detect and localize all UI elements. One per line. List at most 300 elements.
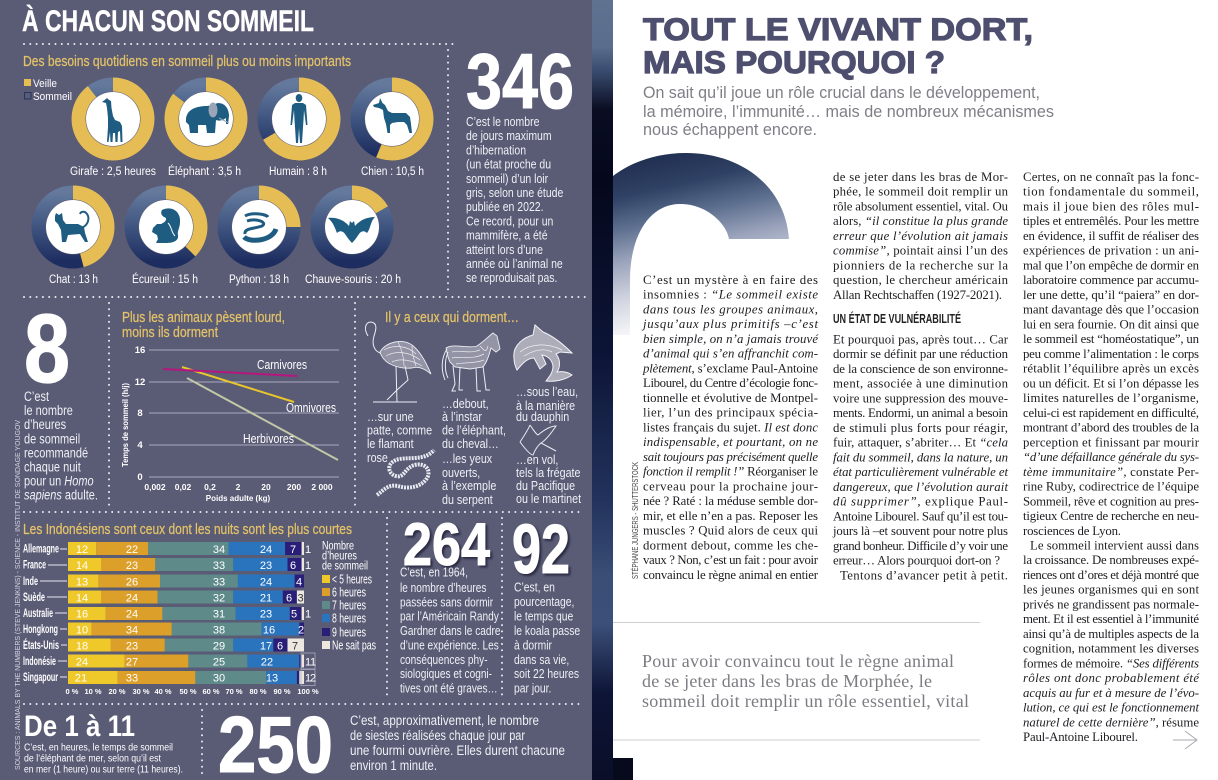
article column 3: ainsi qu’à de multiples aspects de la (1023, 627, 1199, 641)
legend: hours of sleep: Ne sait pas (332, 638, 376, 652)
row: Hongkong: 10 (76, 624, 88, 636)
article column 3: “d’une défaillance générale du sys- (1023, 450, 1199, 464)
row: France: France (23, 560, 46, 572)
article column 3: celui-ci est rapidement en difficulté, (1023, 406, 1199, 420)
article column 2: rôle absolument essentiel, vital. Ou (833, 200, 1009, 214)
y axis labels: Temps de sommeil (h/j) (120, 383, 130, 467)
row: Singapour: 13 (266, 672, 278, 684)
article column 3: ment. Et il est essentiel à l’immunité (1023, 612, 1199, 626)
article column 1: listes français du sujet. Il est donc (643, 420, 818, 434)
percentage axis (66, 687, 319, 696)
article column 1: tionnelle et évolutive de Montpel- (643, 391, 818, 405)
stat block: 264 hours without sleep: conséquences phy- (400, 654, 488, 667)
row: Australie: 24 (126, 608, 138, 620)
article column 3: Certes, on ne connaît pas la fonc- (1023, 170, 1199, 184)
y axis labels: 8 (137, 408, 143, 419)
stat block: 92 percent koala: soit 22 heures (514, 667, 579, 681)
stat block: 346 days of hibernation: 346 (466, 37, 574, 125)
stat block: 264 hours without sleep: Gardner dans le cadre (400, 625, 500, 638)
article column 3: laboratoire commence par accumu- (1023, 273, 1199, 287)
heading: heavier animals sleep less: Plus les animaux pèsent lourd, (122, 310, 285, 326)
line: herbivores (187, 378, 338, 460)
percentage axis: 90 % (273, 687, 291, 696)
donut: chauve-souris 20 hours: Chauve-souris : 20 h (305, 274, 401, 286)
line: herbivores: Herbivores (243, 432, 294, 446)
caption: snake (442, 451, 497, 507)
caption: horse: du cheval… (442, 436, 499, 451)
row: Allemagne: 22 (126, 544, 138, 556)
caption: snake: du serpent (442, 492, 493, 507)
article column 3: montrant d’abord des troubles de la (1023, 421, 1199, 435)
percentage axis: 70 % (225, 687, 243, 696)
article column 3: tigieux Centre de recherche en neu- (1023, 509, 1199, 523)
article column 3: riences ont d’ores et déjà montré que (1023, 568, 1199, 582)
illustration: frigate bird (520, 425, 556, 455)
row: Singapour: 33 (126, 672, 138, 684)
stat block: 346 days of hibernation: année où l’animal ne (466, 257, 563, 271)
caption: horse (442, 396, 506, 451)
article column 2: Et pourquoi pas, après tout… Car (833, 332, 1009, 346)
percentage axis: 100 % (297, 687, 319, 696)
legend: veille and sommeil: Veille (33, 78, 57, 90)
percentage axis: 40 % (154, 687, 172, 696)
caption: flamingo: patte, comme (367, 423, 432, 438)
legend: hours of sleep: de sommeil (322, 560, 368, 572)
row: Inde: 26 (126, 576, 138, 588)
article column 1 (641, 273, 819, 582)
drop cap C (613, 153, 789, 335)
row: Indonésie: 1 (310, 656, 316, 668)
article column 3: tion fondamentale du sommeil, (1023, 185, 1199, 199)
caption: frigate: ou le martinet (516, 491, 582, 506)
caption: horse: à l’instar (442, 409, 482, 424)
article title (643, 11, 1033, 80)
row: Suède (23, 590, 304, 604)
row: Australie: 16 (76, 608, 88, 620)
row: États-Unis: 29 (213, 640, 225, 652)
pull quote: sommeil doit remplir un rôle essentiel, vital (642, 691, 969, 711)
stat block: de 1 à 11: C’est, en heures, le temps de sommeil (24, 742, 173, 754)
y axis labels: 4 (137, 440, 143, 451)
row: Suède: 3 (297, 592, 304, 604)
row: Suède: 6 (286, 592, 292, 604)
article column 2: voire une suppression des mouve- (833, 392, 1008, 406)
stat block: 264 hours without sleep: passées sans dormir (400, 597, 493, 610)
caption: frigate: du Pacifique (516, 478, 576, 493)
article column 1: lier, l’un des principaux spécia- (643, 406, 818, 420)
article column 3: ler une dette, qu’il “paiera” en dor- (1023, 288, 1199, 302)
row: États-Unis (23, 638, 304, 652)
article column 1: dans tous les groupes animaux, (643, 302, 818, 316)
pull quote: Pour avoir convaincu tout le règne animal (642, 651, 954, 671)
row: États-Unis: 23 (126, 640, 138, 652)
row: Allemagne: Allemagne (23, 544, 59, 556)
donut: éléphant 3.5 hours: Éléphant : 3,5 h (168, 165, 241, 178)
article column 1: C’est un mystère à en faire des (643, 273, 818, 287)
x axis labels: 20 (261, 482, 271, 492)
article column 3: rétablit l’équilibre après un excès (1023, 362, 1199, 376)
row: Suède: 14 (76, 592, 88, 604)
article column 1: cerveau pour la prochaine jour- (643, 479, 818, 493)
stat block: 8 hours recommended (24, 294, 98, 503)
arrow: continue reading (1173, 731, 1197, 749)
donut: chien 10.5 hours (358, 84, 426, 178)
stat block: de 1 à 11: en mer (1 heure) ou sur terre (11 heures). (24, 764, 183, 776)
row: France: 1 (305, 560, 311, 572)
row: Suède: 32 (213, 592, 225, 604)
article column 3: rôles ont donc probablement été (1023, 671, 1200, 685)
row: Allemagne (23, 542, 311, 556)
article column 2: pionniers de la recherche sur la (833, 258, 1008, 272)
x axis labels: 2 000 (311, 482, 333, 492)
article column 2: dû supprimer”, explique Paul- (833, 495, 1008, 509)
article subtitle: nous échappent encore. (643, 121, 817, 139)
row: Indonésie: 27 (126, 656, 138, 668)
subheading: un état de vulnérabilité: UN ÉTAT DE VULNÉRABILITÉ (833, 311, 961, 326)
donut: python 18 hours: Python : 18 h (229, 274, 289, 286)
donut: humain 8 hours: Humain : 8 h (269, 166, 327, 178)
stat block: 264 hours without sleep: le nombre d’heures (400, 582, 487, 595)
stat block: 346 days of hibernation: d’hibernation (466, 143, 526, 158)
article column 3: perception et finissant par mourir (1023, 435, 1200, 449)
row: Australie: 5 (291, 608, 297, 620)
stat block: 8 hours recommended: 8 (24, 294, 70, 403)
stat block: 264 hours without sleep: C’est, en 1964, (400, 567, 468, 580)
x axis labels: 0,002 (144, 482, 166, 492)
article column 3: acquis au fur et à mesure de l’évo- (1023, 686, 1199, 700)
row: Hongkong: 2 (298, 624, 304, 636)
row: Suède: 21 (260, 592, 272, 604)
legend: veille and sommeil: Sommeil (33, 91, 72, 103)
caption: frigate: …en vol, (516, 452, 558, 467)
donut: humain 8 hours (264, 84, 334, 178)
donut: chat 13 hours: Chat : 13 h (49, 274, 98, 286)
stat block: 8 hours recommended: chaque nuit (24, 459, 81, 475)
donut: python 18 hours (224, 192, 294, 286)
article column 1: née ? Raté : la méduse semble dor- (643, 494, 818, 508)
row: Australie: 1 (305, 608, 311, 620)
article column 2: Antoine Libourel. Sauf qu’il est tou- (833, 509, 1008, 523)
row: Inde: 33 (213, 576, 225, 588)
caption: snake: ouverts, (442, 465, 480, 480)
article column 3: en évidence, il suffit de réaliser des (1023, 229, 1199, 243)
row: États-Unis: 18 (76, 640, 88, 652)
pull quote (613, 622, 980, 740)
article column 3: Le sommeil intervient aussi dans (1030, 538, 1199, 552)
stat block: 264 hours without sleep: siologiques et cogni- (400, 668, 492, 681)
row: Australie: 31 (213, 608, 225, 620)
percentage axis: 80 % (249, 687, 267, 696)
stat block: 264 hours without sleep (400, 511, 500, 696)
x axis labels: Poids adulte (kg) (206, 494, 271, 503)
legend: hours of sleep: d’heures (322, 550, 357, 562)
stat block: 92 percent koala: 92 (512, 510, 570, 588)
stat block: 346 days of hibernation: gris, selon une étude (466, 186, 563, 200)
article column 1: jusqu’aux plus primitifs –c’est (641, 317, 818, 331)
article column 1: Libourel, du Centre d’écologie fonc- (643, 376, 818, 390)
x axis labels: 200 (287, 482, 301, 492)
stat block: de 1 à 11 (24, 710, 183, 776)
caption: flamingo: rose (367, 450, 388, 465)
heading: indonesians sleep least: Les Indonésiens sont ceux dont les nuits sont les plus courtes (23, 522, 352, 538)
article column 2: état particulièrement vulnérable et (833, 465, 1008, 479)
x axis labels: 0,02 (175, 482, 192, 492)
article column 2: fuir, attaquer, s’abriter… Et “cela (833, 436, 1008, 450)
article column 2: ment, associée à une diminution (833, 377, 1009, 391)
legend: hours of sleep: Nombre (322, 540, 354, 552)
percentage axis: 10 % (84, 687, 102, 696)
stat block: 250 ant naps: une fourmi ouvrière. Elles durent chacune (350, 743, 565, 758)
row: États-Unis: 17 (260, 640, 272, 652)
article column 1: mir, et elle n’en a pas. Reposer les (643, 509, 818, 523)
article column 1: fonction il remplit !” Réorganiser le (643, 465, 818, 479)
stat block: de 1 à 11: De 1 à 11 (24, 710, 135, 743)
percentage axis: 30 % (132, 687, 150, 696)
article column 3: le sommeil est “homéostatique”, un (1023, 332, 1200, 346)
donut: girafe 2.5 hours (70, 84, 156, 178)
article column 3 (1023, 170, 1200, 744)
article column 3: Sommeil, rêve et cognition au pres- (1023, 494, 1199, 508)
row: France: 23 (126, 560, 138, 572)
row: Singapour: 30 (213, 672, 225, 684)
caption: dolphin: …sous l’eau, (516, 384, 578, 399)
legend: hours of sleep (322, 540, 376, 652)
stat block: 250 ant naps: de siestes réalisées chaque jour par (350, 728, 525, 743)
row: États-Unis: 6 (277, 640, 283, 652)
stat block: 92 percent koala: à dormir (514, 639, 552, 653)
panel: how some animals sleep (365, 310, 582, 507)
article column 3: la croissance. De nombreuses expé- (1023, 553, 1199, 567)
cloud strip between the two pages (592, 0, 633, 780)
stat block: 8 hours recommended: sapiens adulte. (24, 488, 98, 503)
article column 2: commise”, pointait ainsi l’un des (833, 244, 1008, 258)
article column 3: formes de mémoire. “Ses différents (1023, 656, 1199, 670)
row: Hongkong: 16 (263, 624, 275, 636)
row: France: 6 (290, 560, 296, 572)
row: Indonésie: Indonésie (23, 656, 56, 668)
illustration: flamingo (365, 322, 431, 402)
row: Allemagne: 24 (260, 544, 272, 556)
article column 3: naturel de cette dernière”, résume (1023, 715, 1199, 729)
stat block: 8 hours recommended: pour un Homo (24, 474, 94, 489)
article column 3: ou un déficit. Et si l’on dépasse les (1023, 376, 1199, 390)
article column 3: rine Ruby, codirectrice de l’équipe (1023, 480, 1199, 494)
article subtitle: On sait qu’il joue un rôle crucial dans le développement, (643, 84, 1040, 102)
article column 3: cognition, notamment les diverses (1023, 642, 1199, 656)
title: à chacun son sommeil: À CHACUN SON SOMMEIL (22, 4, 314, 38)
row: Hongkong: 34 (126, 624, 138, 636)
article column 3: privés ne grandissent pas normale- (1023, 598, 1199, 612)
row: Singapour (23, 670, 316, 686)
row: Inde: 24 (260, 576, 272, 588)
stat block: 264 hours without sleep: par l’Américain Randy (400, 611, 499, 624)
donut: chien 10.5 hours: Chien : 10,5 h (361, 166, 424, 178)
caption: dolphin: à la manière (516, 398, 576, 413)
stat block: 8 hours recommended: le nombre (24, 403, 73, 418)
heading: heavier animals sleep less (122, 310, 285, 341)
article column 1: muscles ? Quid alors de ceux qui (643, 524, 818, 538)
row: Indonésie: 1 (305, 656, 311, 668)
row: Australie (23, 607, 311, 620)
stat block: 92 percent koala: pourcentage, (514, 595, 574, 609)
article column 1: sait toujours pas précisément quelle (643, 450, 818, 464)
row: Singapour: 21 (75, 672, 87, 684)
article column 2: phée, le sommeil doit remplir un (833, 185, 1009, 199)
stat block: 264 hours without sleep: 264 (403, 511, 491, 578)
article column 3: lui en sera fournie. On dit ainsi que (1023, 317, 1199, 331)
stat block: 346 days of hibernation: mammifère, a été (466, 229, 548, 243)
caption: snake: …les yeux (442, 451, 492, 466)
row: Inde: Inde (23, 576, 38, 588)
percentage axis: 20 % (108, 687, 126, 696)
caption: flamingo: le flamant (367, 436, 414, 451)
row: Allemagne: 34 (213, 544, 225, 556)
legend: hours of sleep: < 5 heures (332, 572, 372, 586)
stat block: 264 hours without sleep: tives ont été graves… (400, 683, 498, 696)
caption: dolphin: du dauphin (516, 409, 569, 424)
article column 2: erreur que l’évolution ait jamais (833, 229, 1008, 243)
caption: frigate: tels la frégate (516, 465, 581, 480)
article column 2: erreur… Alors pourquoi dort-on ? (833, 554, 1000, 568)
article column 2: dangereux, que l’évolution aurait (833, 480, 1008, 494)
row: France: 33 (213, 560, 225, 572)
pull quote: de se jeter dans les bras de Morphée, le (642, 671, 932, 691)
line: carnivores: Carnivores (257, 358, 307, 372)
row: Hongkong: Hongkong (23, 624, 58, 636)
heading: heavier animals sleep less: moins ils dorment (122, 325, 218, 341)
stat block: 346 days of hibernation: sommeil) d’un loir (466, 172, 548, 186)
article column 3: rosciences de Lyon. (1023, 524, 1121, 538)
row: Inde: 13 (76, 576, 88, 588)
row: France (23, 558, 311, 572)
article column 3: expériences de privation : un ani- (1023, 244, 1199, 258)
article column 2: Allan Rechtschaffen (1927-2021). (833, 288, 1002, 302)
row: Indonésie: 22 (261, 656, 273, 668)
line: carnivores (163, 358, 307, 376)
y axis labels: 0 (137, 472, 143, 483)
article column 1: dorment debout, comme les che- (643, 538, 818, 552)
article column 2: jours là –et souvent pour notre plus (832, 524, 1008, 538)
article column 3: peu comme l’alimentation : le corps (1023, 347, 1199, 361)
source credit, vertical: SOURCES : ANIMALS BY THE NUMBERS (STEVE JENKINS) - SCIENCE - INSTITUT DE SONDAGE YOUGOV (13, 420, 22, 770)
caption: flamingo: …sur une (367, 409, 414, 424)
donut: chat 13 hours (38, 192, 108, 286)
stat block: 92 percent koala: dans sa vie, (514, 653, 569, 667)
article column 1: convaincu le règne animal en entier (643, 568, 819, 582)
article column 1: plètement, s’exclame Paul-Antoine (642, 361, 818, 375)
stat block: 250 ant naps (218, 700, 565, 780)
row: Allemagne: 1 (305, 544, 311, 556)
stat block: 346 days of hibernation: (un état proche du (466, 158, 551, 172)
article column 2: ments. Endormi, un animal a besoin (833, 406, 1009, 420)
stat block: 8 hours recommended: d’heures (24, 417, 66, 432)
row: Australie: 23 (260, 608, 272, 620)
stat block: 264 hours without sleep: d’une expérience. Les (400, 640, 499, 653)
y axis labels (120, 345, 145, 483)
row: France: 23 (260, 560, 272, 572)
x axis labels (144, 482, 333, 503)
donut: écureuil 15 hours: Écureuil : 15 h (132, 273, 198, 286)
article column 3: lution, ce qui est le fonctionnement (1023, 701, 1199, 715)
article column 2: Tentons d’avancer petit à petit. (840, 568, 1008, 582)
legend: veille and sommeil (24, 78, 72, 103)
row: Inde (23, 574, 304, 588)
article column 2: alors, “il constitue la plus grande (833, 214, 1008, 228)
stat block: de 1 à 11: de l’éléphant de mer, selon qu’il est (24, 754, 161, 764)
article subtitle (643, 84, 1054, 139)
panel: daily sleep needs donuts (23, 54, 426, 286)
article column 1: vaux ? Non, c’est un fait : pour avoir (643, 553, 819, 567)
row: Singapour: Singapour (23, 672, 58, 684)
article column 3: Paul-Antoine Libourel. (1023, 730, 1138, 744)
stat block: 346 days of hibernation: se reproduisait pas. (466, 271, 557, 285)
line chart: sleep time vs body weight (120, 310, 339, 503)
stat block: 346 days of hibernation: publiée en 2022. (466, 200, 544, 214)
stat block: 346 days of hibernation: de jours maximum (466, 129, 552, 143)
article column 2: de se jeter dans les bras de Mor- (833, 170, 1008, 184)
row: Indonésie: 25 (213, 656, 225, 668)
percentage axis: 0 % (66, 687, 79, 696)
article column 2 (832, 170, 1009, 582)
row: Singapour: 1 (305, 672, 311, 684)
article column 3: mal que l’on empêche de dormir en (1023, 258, 1200, 272)
article column 2: de la conscience de son environne- (833, 362, 1008, 376)
y axis labels: 12 (135, 377, 145, 388)
article column 1: d’animal qui s’en affranchit com- (643, 347, 818, 361)
row: Suède: Suède (23, 592, 45, 604)
row: États-Unis: États-Unis (23, 639, 59, 652)
article column 2: fait du sommeil, dans la nature, un (833, 450, 1008, 464)
illustration: snake (377, 450, 434, 495)
stat block: 92 percent koala (512, 510, 580, 696)
article title: TOUT LE VIVANT DORT, (643, 11, 1033, 47)
legend: hours of sleep: 8 heures (332, 612, 366, 626)
heading: those who sleep: Il y a ceux qui dorment… (385, 310, 519, 326)
stat block: 346 days of hibernation: atteint lors d’une (466, 243, 543, 257)
row: Hongkong: 38 (213, 624, 225, 636)
caption: snake: à l’exemple (442, 478, 497, 493)
row: Indonésie: 24 (76, 656, 88, 668)
row: Australie: Australie (23, 608, 53, 620)
article column 2: dormir se définit par une réduction (833, 347, 1009, 361)
article column 2: de stimuli plus forts pour réagir, (833, 421, 1008, 435)
row: Allemagne: 7 (290, 544, 296, 556)
legend: hours of sleep: 9 heures (332, 626, 366, 640)
heading: daily sleep needs: Des besoins quotidiens en sommeil plus ou moins importants (23, 54, 351, 70)
line: omnivores: Omnivores (286, 401, 336, 415)
photo credit, vertical: STÉPHANE JUNGERS - SHUTTERSTOCK (631, 462, 640, 579)
caption: dolphin (516, 384, 578, 424)
illustration: horse (442, 333, 500, 391)
illustration: dolphin (514, 325, 572, 381)
panel: background of the left infographic page (0, 0, 592, 780)
article column 2: question, le chercheur américain (833, 273, 1009, 287)
donut: éléphant 3.5 hours (168, 84, 241, 178)
y axis labels: 16 (135, 345, 145, 356)
stat block: 92 percent koala: le koala passe (514, 624, 580, 638)
article title: MAIS POURQUOI ? (643, 44, 945, 80)
stacked bar chart: hours of sleep by country (23, 522, 376, 696)
caption: horse: de l’éléphant, (442, 423, 506, 438)
row: États-Unis: 7 (292, 640, 298, 652)
caption: flamingo (367, 409, 432, 465)
article column 3: limites naturelles de l’organisme, (1023, 391, 1199, 405)
stat block: 8 hours recommended: recommandé (24, 445, 88, 461)
stat block: 346 days of hibernation (466, 37, 574, 285)
article subtitle: la mémoire, l’immunité… mais de nombreux mécanismes (643, 103, 1054, 121)
percentage axis: 50 % (179, 687, 197, 696)
row: Hongkong (23, 622, 304, 636)
